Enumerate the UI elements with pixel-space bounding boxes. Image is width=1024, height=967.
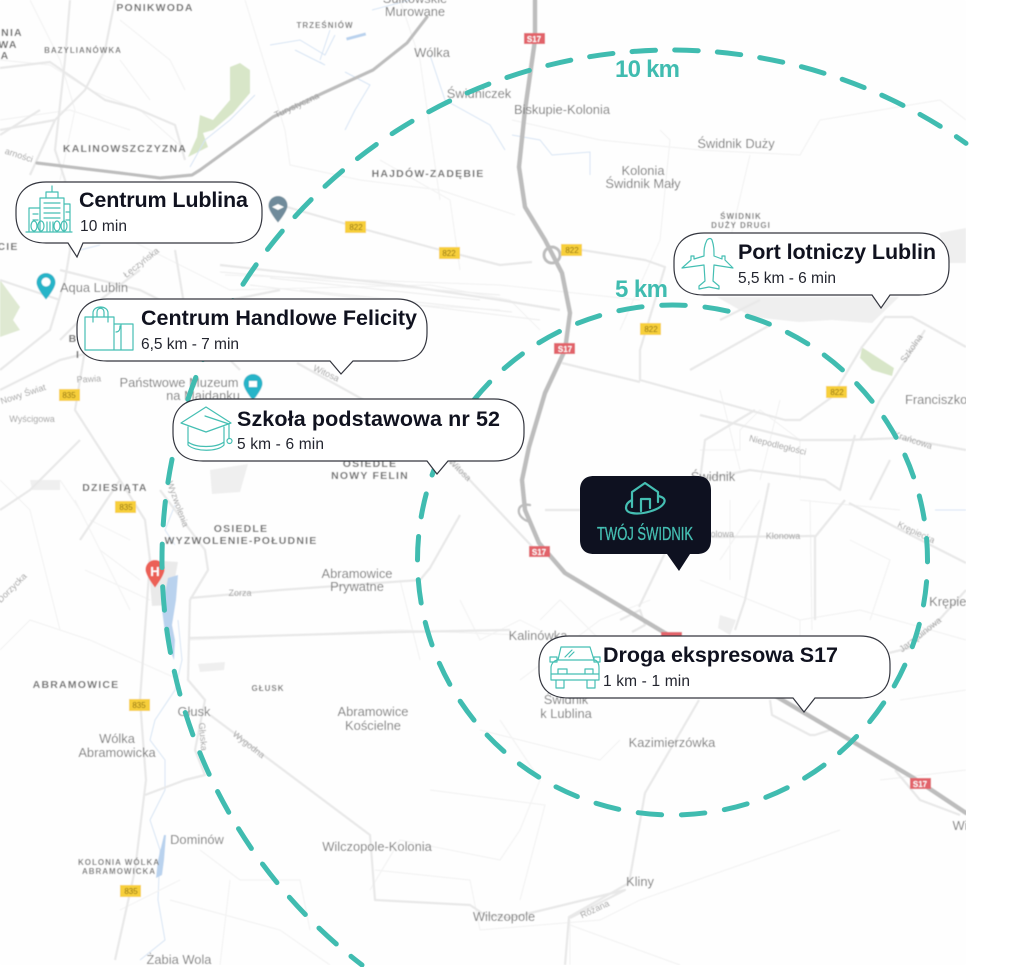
icon: airplane [682, 238, 733, 289]
map place labels: KALINOWSZCZYZNA [63, 143, 187, 155]
callout: Szkoła podstawowa nr 52 [173, 399, 524, 474]
railway lines [220, 272, 540, 320]
map place labels: PONIKWODA [116, 2, 194, 14]
road number badges: 822 [442, 249, 456, 258]
icon: city buildings [26, 186, 72, 232]
map place labels: Kościelne [345, 718, 401, 733]
map place labels: ABRAMOWICKA [82, 867, 156, 876]
map place labels: B [69, 333, 77, 345]
callout: Port lotniczy Lublin: 5,5 km - 6 min [738, 270, 836, 287]
callout: Szkoła podstawowa nr 52: Szkoła podstawowa nr 52 [237, 407, 500, 431]
road number badges: 835 [124, 887, 138, 896]
map place labels: GŁUSK [252, 684, 284, 693]
map place labels: KOLONIA WÓLKA [78, 858, 160, 867]
map place labels: Wilczopole-Kolonia [322, 839, 433, 854]
map place labels: NIA [1, 27, 23, 39]
map place labels: Różana [579, 898, 611, 920]
map place labels: k Lublina [540, 706, 593, 721]
10 km range circle [162, 50, 966, 965]
road number badges: S17 [527, 35, 542, 44]
map place labels: Nowy Świat [0, 381, 47, 406]
label: 10 km: 10 km [615, 56, 680, 83]
map place labels: Jarzębinowa [897, 615, 943, 654]
road number badges: 822 [644, 325, 658, 334]
map place labels: Świdnik Duży [697, 136, 775, 151]
map place labels: Świdniczek [447, 86, 512, 101]
map place labels: Wólka [99, 731, 136, 746]
map place labels: Witosa [312, 363, 341, 384]
map place labels: NOWY FELIN [331, 470, 409, 482]
map place labels: HAJDÓW-ZADĘBIE [372, 167, 484, 180]
map place labels: Prywatne [330, 579, 384, 594]
callout: Centrum Lublina: 10 min [80, 218, 127, 235]
map place labels: Świdnik [691, 469, 736, 484]
callout: Centrum Handlowe Felicity: Centrum Handlowe Felicity [141, 306, 417, 330]
map place labels: Abramowicka [78, 745, 157, 760]
map place labels: Dominów [170, 832, 225, 847]
map place labels: Turystyczna [273, 91, 321, 120]
map place labels: OSIEDLE [343, 458, 397, 470]
map place labels: Abramowice [322, 566, 392, 581]
map place labels: Wyścigowa [9, 414, 55, 424]
label: 5 km: 5 km [615, 276, 668, 303]
callout: Szkoła podstawowa nr 52: 5 km - 6 min [237, 436, 324, 453]
map place labels: Łęczyńska [121, 246, 161, 280]
map place labels: A [1, 50, 9, 62]
map place labels: DUŻY DRUGI [711, 221, 771, 230]
map place labels: Witosa [447, 457, 473, 483]
map place labels: Wygodna [231, 729, 267, 760]
road number badges [59, 33, 931, 897]
road number badges: 835 [132, 701, 146, 710]
map place labels: Topolowa [696, 529, 734, 539]
map place labels: ŚWIDNIK [720, 212, 762, 221]
map place labels: Szkolna [898, 332, 925, 364]
icon: shopping bags [85, 307, 133, 350]
icon: car [550, 647, 600, 688]
map place labels: Krępiec [929, 594, 973, 609]
map place labels: TRZEŚNIÓW [296, 21, 354, 30]
callout: Droga ekspresowa S17: Droga ekspresowa S17 [603, 643, 838, 667]
map place labels: Wilczopole [473, 909, 535, 924]
icon: graduation cap [181, 407, 232, 450]
5 km range circle [418, 305, 928, 815]
map place labels: WYZWOLENIE-POŁUDNIE [165, 535, 317, 547]
map place labels: Krępiecka [896, 519, 937, 545]
map place labels: ABRAMOWICE [33, 679, 119, 691]
map place labels: Pawia [76, 373, 101, 385]
map place labels: Świdnik Mały [605, 176, 681, 191]
callout: Centrum Handlowe Felicity [77, 299, 427, 374]
map place labels: Wyzwolenia [165, 480, 191, 528]
callout: Port lotniczy Lublin [674, 233, 949, 308]
callout: Droga ekspresowa S17 [539, 636, 890, 712]
map place labels: arności [4, 146, 34, 164]
map place labels: Kazimierzówka [629, 735, 716, 750]
map place labels: Krańcowa [892, 429, 934, 451]
map place labels: Państwowe Muzeum [120, 375, 238, 390]
map place labels: Wólka [414, 45, 451, 60]
map pins [36, 196, 288, 588]
callout: Droga ekspresowa S17: 1 km - 1 min [603, 673, 690, 690]
expressway S17 and Turystyczna [37, 0, 966, 813]
callout: Centrum Handlowe Felicity: 6,5 km - 7 min [141, 336, 239, 353]
icon: house with ring [626, 483, 665, 513]
road number badges: 822 [349, 223, 363, 232]
road number badges: 822 [830, 388, 844, 397]
map place labels: Zorza [228, 588, 252, 598]
map place labels: Klonowa [766, 531, 800, 541]
callout: Centrum Lublina [16, 182, 262, 257]
map place labels: Kalinówka [509, 628, 568, 643]
map place labels: Franciszko [905, 392, 967, 407]
minor roads [59, 49, 873, 965]
map place labels: na Majdanku [166, 388, 240, 403]
map place labels: Głusk [178, 704, 211, 719]
road number badges: 835 [119, 503, 133, 512]
map place labels: Abramowice [338, 704, 408, 719]
map place labels: DZIESIĄTA [82, 482, 148, 494]
map place labels: BAZYLIANÓWKA [44, 46, 122, 55]
callout: Centrum Lublina: Centrum Lublina [79, 188, 249, 212]
road number badges: 835 [62, 391, 76, 400]
map place labels: Kolonia [621, 163, 665, 178]
map place labels: Świdnik [544, 692, 589, 707]
map pins: H [150, 564, 160, 579]
map place labels: I [76, 349, 80, 361]
road number badges: S17 [913, 780, 928, 789]
map place labels: Wi [952, 818, 968, 833]
road number badges: S17 [558, 345, 573, 354]
callout: Port lotniczy Lublin: Port lotniczy Lublin [738, 240, 936, 264]
marker: Twój Świdnik logo: TWÓJ ŚWIDNIK [597, 523, 693, 544]
marker: Twój Świdnik logo [580, 476, 711, 571]
map place labels: Biskupie-Kolonia [514, 102, 611, 117]
map place labels: Kliny [626, 874, 655, 889]
green areas and grey land use [0, 63, 966, 672]
map place labels: Głuska [197, 722, 209, 751]
road number badges: 822 [565, 246, 579, 255]
map place labels: Aqua Lublin [60, 280, 128, 295]
map place labels: Niepodległości [748, 433, 807, 457]
map place labels: Murowane [385, 4, 445, 19]
map place labels: Żabia Wola [147, 952, 212, 967]
map place labels: OSIEDLE [214, 523, 268, 535]
road number badges: S17 [532, 548, 547, 557]
